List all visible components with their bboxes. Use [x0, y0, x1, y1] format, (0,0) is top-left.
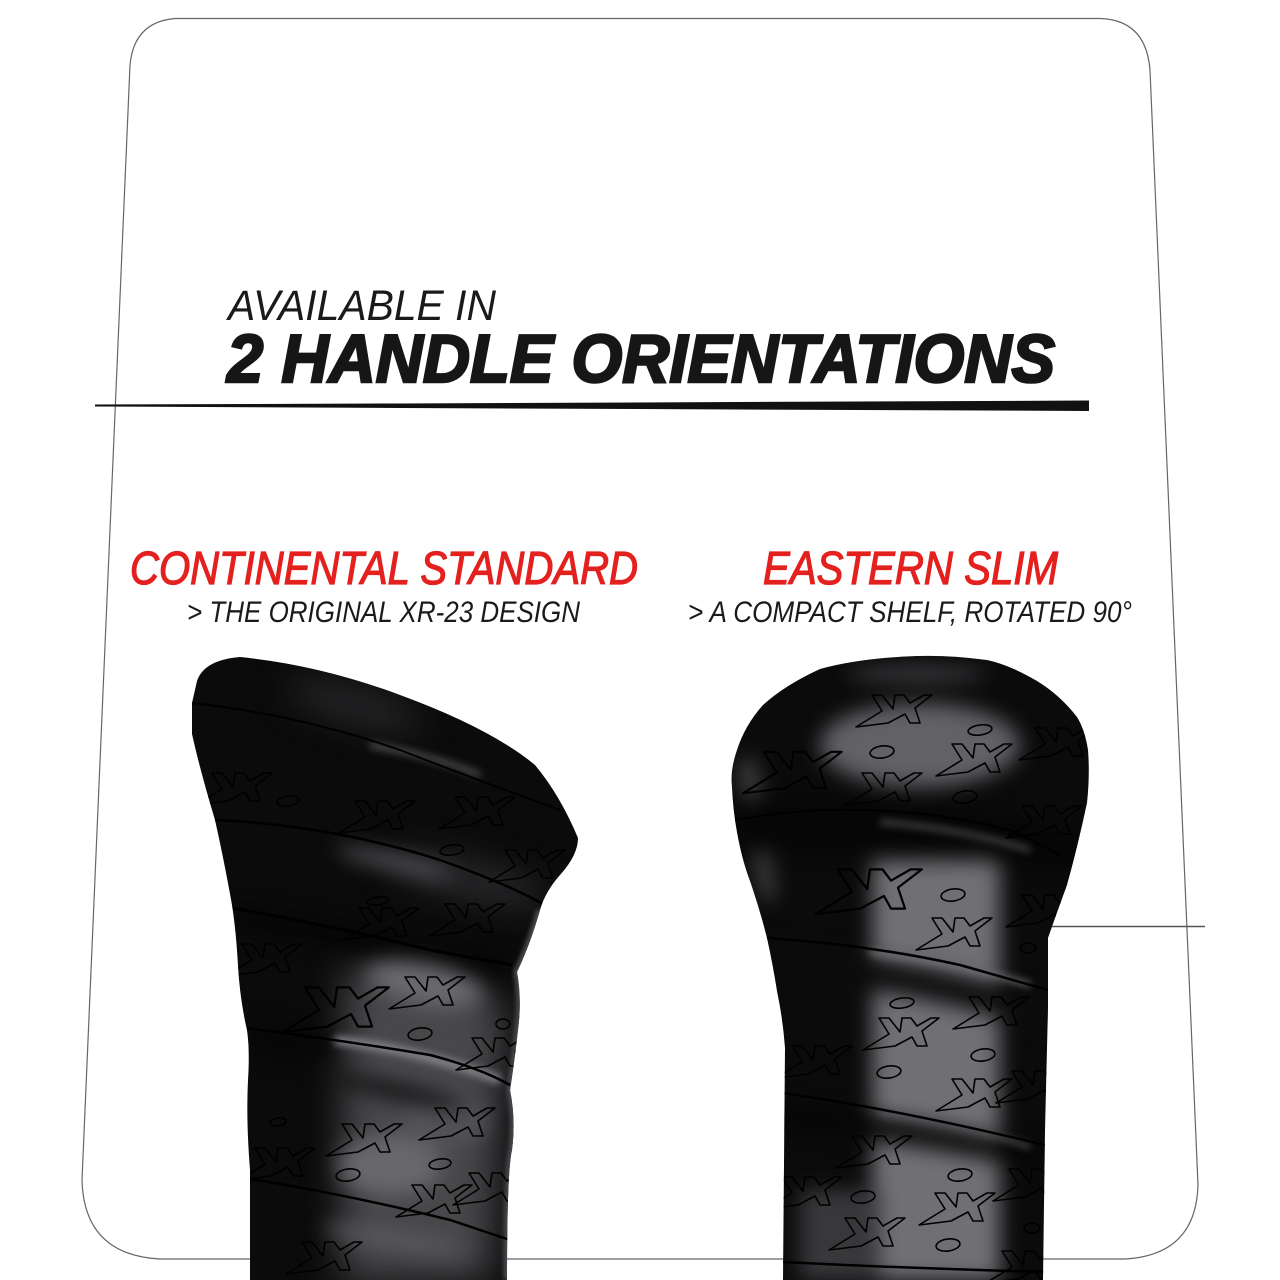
callout line from eastern slim handle: [1050, 926, 1205, 928]
heading: eastern slim: EASTERN SLIM: [763, 542, 1059, 594]
tapered title rule: [95, 400, 1089, 411]
heading: continental standard: [130, 542, 638, 629]
grip tape seams: [192, 703, 560, 1240]
title: [225, 282, 1055, 397]
handle: eastern slim: [725, 650, 1095, 1280]
subheading: original design: > THE ORIGINAL XR-23 DESIGN: [187, 596, 580, 629]
edge rim light: [507, 910, 540, 1280]
title line: 2 handle orientations: 2 HANDLE ORIENTATIONS: [225, 321, 1055, 397]
heading: continental standard: CONTINENTAL STANDARD: [130, 542, 638, 594]
embossed logo marks: [743, 695, 1095, 1280]
embossed logo marks: [196, 773, 565, 1274]
heading: eastern slim: [688, 542, 1132, 629]
subheading: compact shelf: > A COMPACT SHELF, ROTATED 90°: [688, 596, 1132, 629]
grip tape seams: [735, 810, 1060, 1272]
handle: continental standard: [180, 650, 590, 1280]
title line: available in: AVAILABLE IN: [225, 282, 497, 330]
